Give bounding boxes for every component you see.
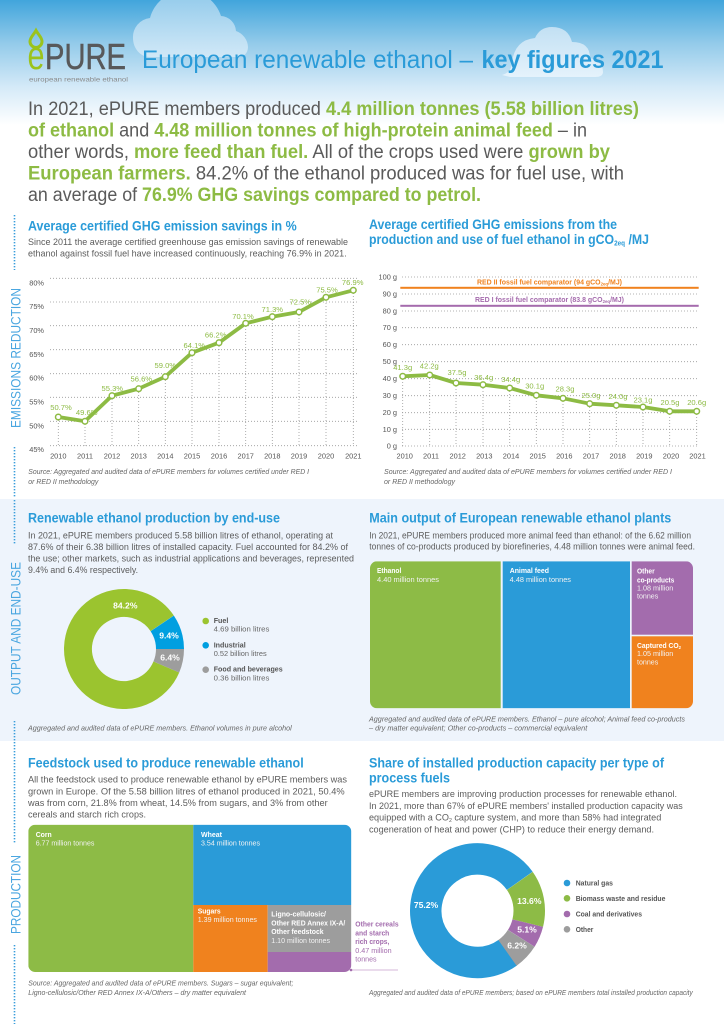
source note — [28, 978, 293, 997]
line chart: emissions: 2015 — [529, 452, 546, 460]
line chart: emissions: 30 g — [383, 391, 397, 400]
text block: cereals and starch rich crops. — [28, 810, 146, 821]
line chart: emissions: 40 g — [383, 374, 397, 383]
line chart: emissions: 60 g — [383, 340, 397, 349]
line chart: emissions: 70 g — [383, 323, 397, 332]
line chart: savings: 66.2% — [205, 330, 227, 340]
treemap: feedstock: Sugars — [198, 906, 221, 915]
text block: ethanol against fossil fuel have increased continuously, reaching 76.9% in 2021. — [28, 249, 347, 260]
treemap: feedstock: Other RED Annex IX-A/ — [271, 918, 345, 927]
legend: 0.36 billion litres — [214, 674, 270, 682]
line chart: savings: 2019 — [291, 452, 307, 460]
panel: production by end-use — [27, 511, 354, 733]
line chart: savings: 2015 — [184, 452, 200, 460]
line chart: savings: 2013 — [130, 452, 147, 460]
source note: Source: Aggregated and audited data of ePURE members for volumes certified under RED I — [384, 467, 673, 476]
comparator lines: /MJ) — [608, 278, 623, 286]
treemap: feedstock: 3.54 million tonnes — [201, 839, 260, 848]
line chart: emissions: 2021 — [689, 452, 706, 460]
treemap: feedstock: Other feedstock — [271, 927, 324, 936]
line chart: emissions: 28.3g — [555, 384, 575, 394]
line chart: emissions: 30.1g — [525, 382, 544, 390]
line chart: savings: 2018 — [264, 452, 281, 460]
text block: capture system, and more than 58% had integrated — [452, 813, 661, 824]
line chart: savings: 70% — [29, 326, 44, 335]
line chart: savings: 2014 — [157, 452, 174, 460]
treemap: output: co-products — [637, 575, 674, 584]
legend: Biomass waste and residue — [576, 894, 665, 903]
text block — [369, 530, 695, 553]
line chart: emissions: 2018 — [609, 452, 626, 460]
source note: or RED II methodology — [28, 477, 99, 486]
comparator lines: RED II fossil fuel comparator (94 gCO — [477, 278, 605, 286]
legend — [564, 878, 665, 934]
text block: 2 — [449, 818, 452, 824]
text block: was from corn, 21.8% from wheat, 14.5% from sugars, and 3% from other — [27, 798, 328, 809]
icon: droplet — [30, 30, 42, 48]
callout: other cereals: tonnes — [355, 955, 377, 964]
donut chart: end-use: 6.4% — [160, 653, 180, 663]
source note — [368, 714, 685, 733]
logo tagline: european renewable ethanol — [29, 76, 129, 83]
heading: process fuels — [369, 771, 450, 786]
source note: Aggregated and audited data of ePURE members. Ethanol – pure alcohol; Animal feed co-products — [368, 714, 685, 723]
legend: Food and beverages — [214, 665, 283, 674]
comparator lines: /MJ) — [610, 295, 625, 304]
line chart: savings: 65% — [29, 350, 44, 359]
logo word PURE: PURE — [45, 36, 126, 77]
title: European renewable ethanol – — [142, 46, 473, 74]
source note — [28, 467, 310, 486]
source note: Aggregated and audited data of ePURE members. Ethanol volumes in pure alcohol — [27, 724, 292, 733]
legend: Coal and derivatives — [576, 910, 642, 918]
line chart: savings: 45% — [29, 445, 44, 454]
line chart: savings: 49.6% — [76, 408, 98, 417]
treemap: output: Animal feed — [510, 566, 549, 575]
legend: 0.52 billion litres — [214, 649, 267, 658]
heading — [369, 217, 649, 248]
donut chart: process fuels: 6.2% — [507, 941, 527, 951]
donut chart: process fuels: 13.6% — [517, 896, 542, 906]
line chart: emissions: 2019 — [636, 452, 653, 460]
line chart: emissions: 2016 — [556, 452, 573, 460]
line chart: savings: 55% — [29, 398, 44, 406]
line chart: savings: 2011 — [77, 452, 93, 460]
panel: main output — [368, 511, 695, 733]
donut chart: process fuels — [405, 838, 550, 983]
comparator lines: 2eq — [603, 299, 610, 304]
heading: Main output of European renewable ethanol plants — [369, 511, 671, 526]
line chart: emissions: 50 g — [383, 357, 397, 366]
callout: other cereals: rich crops, — [355, 937, 389, 946]
donut chart: end-use — [60, 585, 188, 713]
line chart: savings: 2021 — [345, 452, 362, 460]
callout: other cereals — [350, 920, 399, 971]
cloud left — [133, 0, 248, 57]
treemap: feedstock: Ligno-cellulosic/ — [271, 909, 326, 918]
panel: GHG emissions — [369, 217, 706, 486]
text block: equipped with a CO — [369, 813, 453, 824]
treemap: output: tonnes — [637, 657, 659, 666]
line chart: savings: 2010 — [50, 452, 67, 460]
legend: 4.69 billion litres — [214, 624, 270, 634]
text block — [27, 774, 347, 821]
intro text block: European farmers. 84.2% of the ethanol produced was for fuel use, with — [28, 164, 624, 184]
source note — [384, 467, 673, 486]
line chart: savings: 59.0% — [155, 361, 176, 370]
source note: or RED II methodology — [384, 477, 456, 486]
line chart: emissions — [378, 272, 706, 460]
heading: Renewable ethanol production by end-use — [28, 511, 280, 526]
line chart: emissions: 2020 — [663, 452, 679, 460]
line chart: emissions: 10 g — [383, 425, 397, 434]
line chart: emissions: 24.0g — [608, 392, 628, 401]
text block: In 2021, ePURE members produced 5.58 billion litres of ethanol, operating at — [28, 530, 333, 542]
line chart: savings: 50% — [29, 422, 44, 430]
donut chart: process fuels: 75.2% — [414, 900, 439, 910]
line chart: emissions: 2017 — [583, 452, 599, 460]
text block: Since 2011 the average certified greenhouse gas emission savings of renewable — [28, 237, 348, 248]
legend: Natural gas — [576, 878, 613, 888]
text block: 87.6% of their 6.38 billion litres of installed capacity. Fuel accounted for 84.2% of — [28, 542, 348, 553]
line chart: emissions: 37.5g — [447, 368, 467, 377]
treemap: feedstock: 1.10 million tonnes — [271, 936, 330, 945]
intro text block: other words, more feed than fuel. All of the crops used were grown by — [28, 142, 610, 163]
heading: /MJ — [625, 232, 649, 247]
side label: output and end-use: OUTPUT AND END-USE — [8, 562, 24, 695]
text block: In 2021, more than 67% of ePURE members' installed production capacity was — [369, 801, 683, 812]
heading: Feedstock used to produce renewable ethanol — [28, 756, 304, 771]
line chart: savings: 55.3% — [102, 384, 123, 393]
text block: All the feedstock used to produce renewable ethanol by ePURE members was — [28, 774, 347, 785]
callout: other cereals: Other cereals — [355, 920, 399, 929]
treemap: output: Captured CO — [637, 641, 681, 650]
treemap: feedstock: Wheat — [201, 830, 223, 839]
cloud right — [502, 27, 603, 77]
text block: grown in Europe. Of the 5.58 billion litres of ethanol produced in 2021, 50.4% — [28, 786, 345, 797]
logo letter e: e — [28, 34, 44, 78]
header sky background — [0, 0, 724, 125]
treemap: output: 4.40 million tonnes — [377, 575, 439, 584]
heading: Average certified GHG emissions from the — [369, 217, 617, 232]
line chart: emissions: 23.1g — [633, 396, 653, 404]
comparator lines: 2eq — [601, 282, 608, 286]
side label: production: PRODUCTION — [8, 855, 24, 934]
legend: Industrial — [214, 640, 246, 649]
line chart: savings: 2016 — [211, 452, 227, 460]
donut chart: end-use: 84.2% — [113, 601, 138, 611]
heading — [369, 756, 664, 786]
treemap: output: tonnes — [637, 592, 659, 601]
line chart: emissions: 36.4g — [474, 373, 493, 382]
donut chart: process fuels: 5.1% — [517, 924, 537, 934]
treemap: feedstock — [28, 825, 351, 972]
intro text block — [28, 99, 639, 206]
text block: 9.4% and 6.4% respectively. — [28, 565, 138, 576]
heading: 2eq — [614, 240, 625, 248]
source note: Source: Aggregated and audited data of ePURE members. Sugars – sugar equivalent; — [28, 978, 293, 987]
line chart: emissions: 90 g — [383, 290, 397, 298]
logo: ePURE — [28, 30, 129, 83]
line chart: emissions: 2012 — [449, 452, 466, 460]
treemap: output: 1.08 million — [637, 584, 673, 593]
line chart: savings: 56.6% — [131, 374, 152, 384]
heading: Share of installed production capacity per type of — [369, 756, 664, 771]
treemap: output: 2 — [679, 645, 681, 650]
panel: process fuels — [368, 756, 694, 997]
line chart: emissions: 42.2g — [420, 362, 439, 370]
source note: Ligno-cellulosic/Other RED Annex IX-A/Others – dry matter equivalent — [28, 988, 247, 997]
line chart: savings: 2020 — [318, 452, 334, 460]
callout: other cereals: and starch — [355, 928, 389, 937]
heading: production and use of fuel ethanol in gCO — [369, 232, 638, 247]
line chart: savings: 75% — [29, 302, 44, 311]
text block: ePURE members are improving production processes for renewable ethanol. — [369, 789, 677, 800]
treemap: output: Other — [637, 566, 655, 575]
comparator lines — [400, 278, 699, 307]
treemap: output: 4.48 million tonnes — [510, 575, 571, 584]
line chart: savings — [29, 278, 364, 460]
line chart: emissions: 100 g — [378, 272, 397, 282]
legend: Fuel — [214, 616, 228, 625]
line chart: savings: 72.5% — [290, 298, 311, 306]
text block — [28, 237, 348, 260]
treemap: output — [370, 561, 693, 708]
treemap: output: Ethanol — [377, 566, 401, 575]
treemap: feedstock: Corn — [36, 830, 52, 839]
line chart: emissions: 25.0g — [581, 391, 601, 400]
line chart: emissions: 20.6g — [687, 398, 706, 407]
heading: Average certified GHG emission savings in % — [28, 219, 297, 234]
line chart: savings: 80% — [29, 278, 44, 288]
line chart: emissions: 41.3g — [393, 363, 412, 372]
treemap: feedstock: 6.77 million tonnes — [36, 839, 95, 848]
side label: emissions reduction: EMISSIONS REDUCTION — [8, 288, 24, 428]
callout: other cereals: 0.47 million — [355, 946, 392, 955]
line chart: emissions: 20 g — [383, 408, 397, 417]
legend: Other — [576, 925, 594, 934]
line chart: emissions: 2011 — [423, 452, 439, 460]
title — [142, 46, 664, 74]
line chart: emissions: 2013 — [476, 452, 493, 460]
line chart: emissions: 34.4g — [501, 375, 520, 384]
line chart: savings: 76.9% — [342, 278, 364, 287]
line chart: emissions: 2014 — [503, 452, 519, 460]
line chart: emissions: 80 g — [383, 306, 397, 316]
donut chart: end-use: 9.4% — [159, 631, 179, 641]
intro text block: an average of 76.9% GHG savings compared to petrol. — [28, 185, 481, 206]
text block: the use; other markets, such as industrial applications and beverages, represented — [28, 553, 354, 564]
line chart: emissions: 20.5g — [660, 398, 680, 407]
line chart: savings: 70.1% — [232, 312, 254, 321]
source note: – dry matter equivalent; Other co-products – commercial equivalent — [368, 724, 588, 733]
line chart: savings: 50.7% — [50, 403, 72, 412]
text block: cogeneration of heat and power (CHP) to reduce their energy demand. — [369, 824, 654, 835]
title: key figures 2021 — [482, 46, 664, 74]
line chart: savings: 2017 — [237, 452, 254, 460]
intro text block: In 2021, ePURE members produced 4.4 million tonnes (5.58 billion litres) — [28, 99, 639, 120]
legend — [202, 616, 283, 682]
line chart: savings: 2012 — [104, 452, 120, 460]
panel: feedstock — [27, 756, 399, 997]
intro text block: of ethanol and 4.48 million tonnes of high-protein animal feed – in — [28, 120, 587, 142]
section background: output and end-use — [0, 499, 724, 741]
text block — [28, 530, 354, 576]
comparator lines: RED I fossil fuel comparator (83.8 gCO — [475, 295, 607, 304]
line chart: savings: 60% — [29, 374, 44, 382]
line chart: emissions: 0 g — [387, 442, 397, 450]
panel: GHG savings — [28, 219, 364, 486]
line chart: savings: 71.3% — [262, 305, 283, 314]
treemap: output: 1.05 million — [637, 649, 673, 658]
line chart: savings: 64.1% — [184, 341, 205, 350]
text block — [369, 789, 683, 835]
line chart: savings: 75.5% — [316, 286, 338, 294]
line chart: emissions: 2010 — [396, 452, 413, 460]
source note: Source: Aggregated and audited data of ePURE members for volumes certified under RED I — [28, 467, 310, 476]
treemap: feedstock: 1.39 million tonnes — [198, 915, 257, 924]
